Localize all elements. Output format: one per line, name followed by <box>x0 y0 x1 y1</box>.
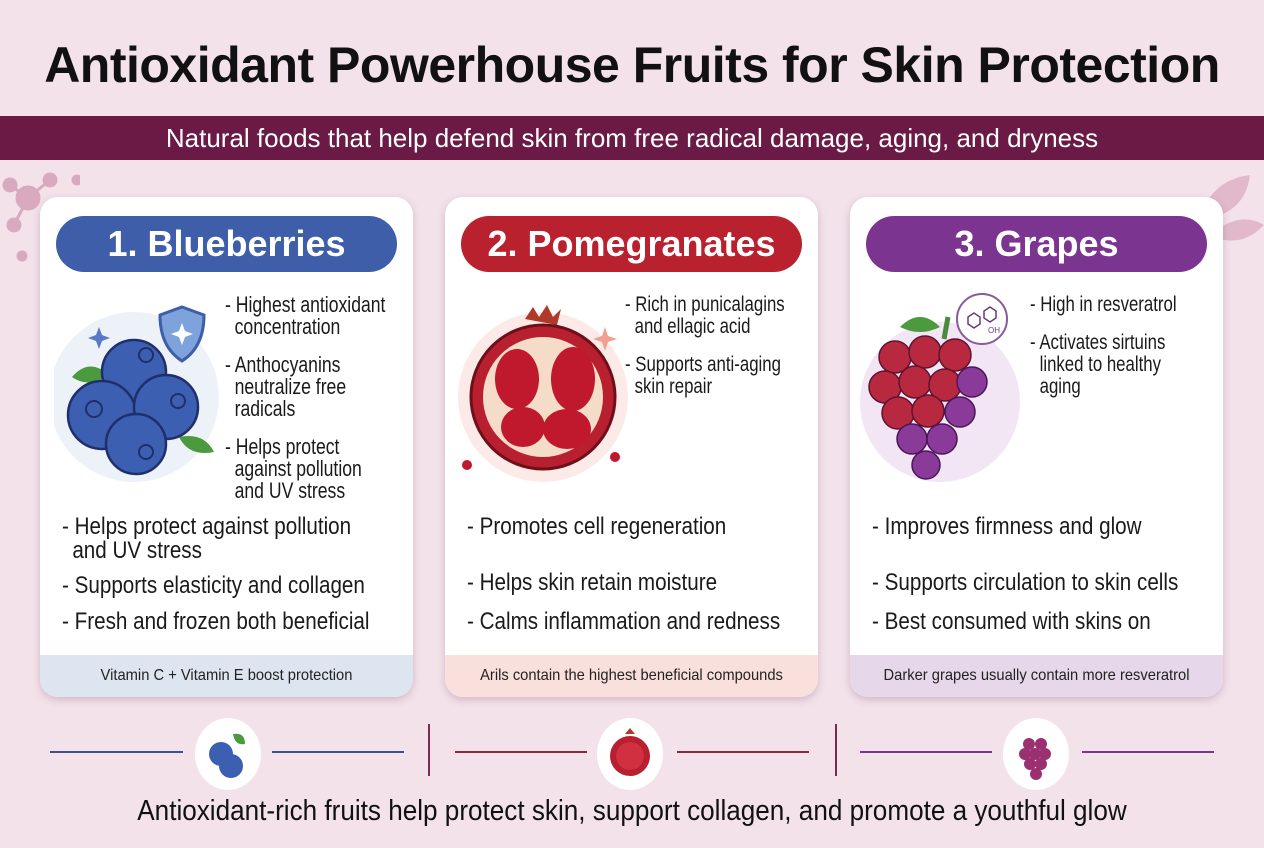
title: Antioxidant Powerhouse Fruits for Skin Protection <box>44 37 1220 93</box>
lower bullets: pomegranates <box>467 513 780 635</box>
upper bullets: blueberries: - Highest antioxidant concentration <box>225 292 385 339</box>
icon: blueberries <box>54 312 219 482</box>
upper bullets: pomegranates: - Supports anti-aging skin repair <box>625 353 781 398</box>
icon: grapes <box>860 316 1020 482</box>
panel: blueberries <box>40 197 413 697</box>
subtitle band: Natural foods that help defend skin from free radical damage, aging, and dryness <box>166 123 1098 153</box>
lower bullets: blueberries: and UV stress <box>72 537 202 564</box>
heading: blueberries <box>56 216 397 272</box>
lower bullets: blueberries: - Helps protect against pollution <box>62 513 351 540</box>
upper bullets: grapes: - Activates sirtuins linked to healthy aging <box>1030 331 1165 398</box>
heading: grapes <box>866 216 1207 272</box>
panel: grapes <box>850 197 1223 697</box>
lower bullets: blueberries: - Supports elasticity and collagen <box>62 572 365 599</box>
upper bullets: pomegranates <box>625 293 785 398</box>
heading: pomegranates: 2. Pomegranates <box>487 223 776 264</box>
icon: small blueberry <box>195 718 261 790</box>
lower bullets: pomegranates: - Calms inflammation and redness <box>467 608 780 635</box>
lower bullets: grapes <box>872 513 1178 635</box>
footer note: pomegranates: Arils contain the highest beneficial compounds <box>480 667 783 684</box>
lower bullets: grapes: - Supports circulation to skin cells <box>872 569 1178 596</box>
panel: pomegranates <box>445 197 818 697</box>
heading: pomegranates <box>461 216 802 272</box>
decoration: leaves <box>1210 175 1264 241</box>
upper bullets: pomegranates: - Rich in punicalagins and ellagic acid <box>625 293 785 338</box>
decoration: molecule <box>2 172 80 262</box>
footer note: blueberries <box>40 655 413 697</box>
footer note: grapes: Darker grapes usually contain more resveratrol <box>884 667 1189 684</box>
lower bullets: blueberries: - Fresh and frozen both beneficial <box>62 608 369 635</box>
upper bullets: blueberries: - Helps protect against pollution and UV stress <box>225 434 362 503</box>
icon: pomegranate <box>458 305 628 482</box>
heading: blueberries: 1. Blueberries <box>107 223 346 264</box>
divider lines <box>50 751 183 753</box>
upper bullets: blueberries: - Anthocyanins neutralize free radicals <box>225 352 346 421</box>
lower bullets: pomegranates: - Helps skin retain moisture <box>467 569 717 596</box>
bottom tagline: Antioxidant-rich fruits help protect skin, support collagen, and promote a youthful glow <box>137 795 1127 827</box>
upper bullets: grapes: - High in resveratrol <box>1030 293 1177 316</box>
footer note: blueberries: Vitamin C + Vitamin E boost protection <box>101 667 352 684</box>
upper bullets: grapes <box>1030 293 1177 398</box>
icon: small pomegranate <box>597 718 663 790</box>
icon: resveratrol molecule: OH <box>988 326 1000 335</box>
upper bullets: blueberries <box>225 292 386 503</box>
icon: small grapes <box>1003 718 1069 790</box>
subtitle band <box>0 116 1264 160</box>
icon: resveratrol molecule <box>956 293 1008 345</box>
footer note: grapes <box>850 655 1223 697</box>
heading: grapes: 3. Grapes <box>954 223 1119 264</box>
footer note: pomegranates <box>445 655 818 697</box>
lower bullets: grapes: - Best consumed with skins on <box>872 608 1151 635</box>
lower bullets: grapes: - Improves firmness and glow <box>872 513 1142 540</box>
lower bullets: pomegranates: - Promotes cell regeneration <box>467 513 726 540</box>
icon: shield <box>158 305 206 363</box>
lower bullets: blueberries <box>62 513 369 635</box>
